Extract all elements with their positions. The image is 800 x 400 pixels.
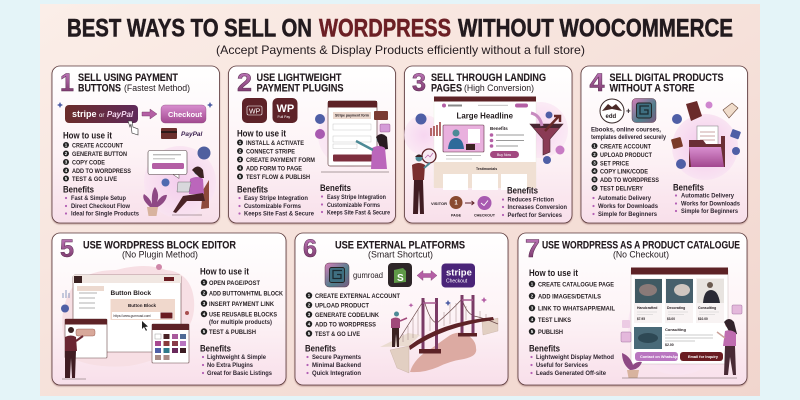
checkout button: Checkout <box>168 110 203 119</box>
steps list: 5 <box>531 329 534 334</box>
icon: shopify: S <box>397 273 404 284</box>
illustration: catalogue browser: Contact on WhatsApp <box>640 355 680 359</box>
steps list <box>237 140 315 181</box>
steps list: 5 <box>593 177 596 182</box>
heading: SELL THROUGH LANDING <box>431 72 546 84</box>
icon: gumroad G <box>632 98 656 122</box>
illustration: catalogue browser: Consulting <box>698 306 716 310</box>
heading: WITHOUT A STORE <box>610 82 694 94</box>
visitor to checkout flow: PAGE <box>451 214 462 218</box>
title: WITHOUT WOOCOMMERCE <box>458 14 733 42</box>
illustration: landing page <box>404 96 568 214</box>
icon: edd <box>600 99 624 123</box>
steps list: CREATE EXTERNAL ACCOUNT <box>315 293 400 300</box>
benefits: Perfect for Services <box>508 212 563 219</box>
benefits <box>529 344 614 377</box>
steps list: 4 <box>203 312 206 316</box>
visitor to checkout flow: VISITOR <box>431 202 448 206</box>
numeral 6: 6 <box>303 235 317 263</box>
illustration: block editor: Button Block <box>128 303 156 308</box>
benefits: Quick Integration <box>312 370 361 377</box>
illustration: woman with laptop <box>57 102 216 218</box>
heading: USE LIGHTWEIGHT <box>256 72 342 84</box>
steps list: TEST & PUBLISH <box>209 329 256 336</box>
steps list: 1 <box>203 280 206 285</box>
steps list: 1 <box>65 143 68 148</box>
benefits right <box>320 183 390 216</box>
steps list: CONNECT STRIPE <box>246 148 296 155</box>
illustration: landing page: Buy Now <box>497 153 511 157</box>
icon: WP Full Pay <box>272 98 298 123</box>
steps list <box>201 279 283 336</box>
steps list: TEST & GO LIVE <box>72 176 118 183</box>
steps list: 1 <box>531 282 534 286</box>
panel 2: lightweight plugins <box>228 66 396 223</box>
steps list: 2 <box>239 148 242 154</box>
heading: PAYMENT PLUGINS <box>256 82 344 94</box>
illustration: landing page: Large Headline <box>456 110 513 120</box>
benefits: Increases Conversion <box>508 204 567 211</box>
steps list: INSERT PAYMENT LINK <box>209 301 274 308</box>
benefits left: Keeps Site Fast & Secure <box>244 211 315 218</box>
heading <box>83 240 236 260</box>
numeral 4: 4 <box>590 69 605 97</box>
description: Ebooks, online courses, <box>591 126 661 134</box>
benefits right: Customizable Forms <box>327 202 380 209</box>
steps list: 5 <box>239 174 242 179</box>
benefits list <box>65 195 140 218</box>
icon: edd: edd <box>606 114 617 120</box>
benefits right: Benefits <box>320 183 351 194</box>
steps list: PUBLISH <box>538 329 563 336</box>
steps list: 4 <box>65 168 68 173</box>
heading: (Fastest Method) <box>124 83 190 93</box>
panel 3: landing pages <box>404 66 572 223</box>
subtitle: (Accept Payments & Display Products efficiently without a full store) <box>216 43 585 57</box>
benefits left <box>237 184 315 218</box>
steps list <box>529 281 615 336</box>
illustration: bridge <box>380 295 498 373</box>
visitor to checkout flow: CHECKOUT <box>474 214 496 218</box>
illustration: catalogue browser: $10.00 <box>698 317 708 321</box>
title <box>67 14 733 42</box>
illustration: folder <box>671 101 741 180</box>
steps list: ADD FORM TO PAGE <box>246 165 303 172</box>
steps list: UPLOAD PRODUCT <box>315 302 369 309</box>
steps list: ADD IMAGES/DETAILS <box>538 293 602 300</box>
benefits right: Benefits <box>673 182 704 194</box>
steps list: ADD TO WORDPRESS <box>315 321 377 328</box>
numeral 5: 5 <box>60 235 74 263</box>
heading: (No Checkout) <box>613 250 669 260</box>
steps list: 3 <box>531 306 534 310</box>
steps list: 4 <box>531 317 534 322</box>
illustration: catalogue browser: $3.00 <box>667 317 675 321</box>
steps list: 5 <box>65 176 68 181</box>
steps list: CREATE CATALOGUE PAGE <box>538 281 615 288</box>
benefits right: Simple for Beginners <box>681 208 739 215</box>
card and PayPal <box>161 128 203 139</box>
illustration: catalogue browser: Email for Inquiry <box>688 355 719 359</box>
icon: WP Full Pay: WP <box>276 103 294 115</box>
heading <box>335 240 465 260</box>
icon: hand cursor <box>128 121 138 135</box>
illustration: block editor: Button Block <box>110 290 151 297</box>
illustration: payment form and woman: Stripe payment form <box>335 114 369 118</box>
steps list: 6 <box>593 186 596 190</box>
title: WORDPRESS <box>319 14 451 42</box>
card and PayPal: PayPal <box>181 131 203 138</box>
benefits left: Works for Downloads <box>598 203 659 210</box>
benefits: Leads Generated Off-site <box>536 370 607 377</box>
double arrow <box>417 270 437 280</box>
plus: + <box>626 106 631 116</box>
illustration: landing page: Testimonials <box>476 167 497 171</box>
steps list: 2 <box>308 302 311 308</box>
steps list: CREATE ACCOUNT <box>600 143 651 150</box>
illustration: payment form and woman <box>315 101 390 172</box>
heading <box>610 72 724 94</box>
benefits <box>502 186 567 219</box>
icon: WP: WP <box>249 108 261 116</box>
benefits left: Benefits <box>237 184 268 196</box>
heading: (Smart Shortcut) <box>368 250 433 260</box>
heading: SELL USING PAYMENT <box>78 72 178 84</box>
panel 7: product catalogue <box>518 233 747 385</box>
benefits: Useful for Services <box>536 362 589 369</box>
steps list: TEST FLOW & PUBLISH <box>246 174 310 181</box>
heading: USE EXTERNAL PLATFORMS <box>335 240 465 252</box>
steps list: (for multiple products) <box>209 319 272 326</box>
steps list: ADD TO WORDPRESS <box>600 177 660 184</box>
panel 1: payment buttons <box>52 66 220 223</box>
illustration: catalogue browser: Handcrafted <box>637 306 657 310</box>
benefits: Reduces Friction <box>508 197 554 204</box>
icon: stripe checkout <box>442 264 475 288</box>
icon: stripe checkout: stripe <box>446 268 472 278</box>
steps list: 3 <box>239 157 242 162</box>
heading: BUTTONS <box>78 82 121 94</box>
benefits left: Automatic Delivery <box>598 195 652 202</box>
steps list: 1 <box>308 293 311 298</box>
steps list: CREATE PAYMENT FORM <box>246 157 315 164</box>
steps list: TEST DELIVERY <box>600 185 644 192</box>
benefits: Secure Payments <box>312 354 362 361</box>
benefits left: Customizable Forms <box>244 203 302 210</box>
numeral 7: 7 <box>525 235 540 263</box>
steps list: 2 <box>531 294 534 298</box>
stripe or paypal button <box>65 105 138 123</box>
icon: stripe checkout: Checkout <box>446 278 468 284</box>
steps list: INSTALL & ACTIVATE <box>246 140 305 147</box>
illustration: block editor: https://www.gumroad.com/ <box>114 314 151 318</box>
heading: USE WORDPRESS BLOCK EDITOR <box>83 240 236 252</box>
steps list: ADD TO WORDPRESS <box>72 168 132 175</box>
illustration: catalogue browser: $7.95 <box>637 317 645 321</box>
benefits heading: Benefits <box>63 184 94 196</box>
panel 6: external platforms <box>295 233 508 385</box>
icon: shopify <box>388 263 412 287</box>
arrow <box>142 109 157 119</box>
steps list: GENERATE BUTTON <box>72 151 127 158</box>
steps list: LINK TO WHATSAPP/EMAIL <box>538 305 615 312</box>
steps list: OPEN PAGE/POST <box>209 280 260 287</box>
benefits right: Easy Stripe Integration <box>327 194 386 201</box>
benefits left: Easy Stripe Integration <box>244 195 308 202</box>
benefits: Lightweight Display Method <box>536 354 614 361</box>
heading: (High Conversion) <box>464 83 534 93</box>
illustration: catalogue browser: Consulting <box>665 327 686 332</box>
benefits right <box>673 182 741 215</box>
heading <box>542 240 740 260</box>
steps list: GENERATE CODE/LINK <box>315 312 379 319</box>
steps list: 4 <box>593 168 596 174</box>
benefits: Minimal Backend <box>312 362 361 369</box>
steps list: 5 <box>308 331 311 336</box>
how to use: How to use it <box>529 268 579 279</box>
steps list: 5 <box>203 329 206 334</box>
steps list: 3 <box>203 301 206 306</box>
steps list: 3 <box>65 160 68 164</box>
illustration: landing page: Benefits <box>490 126 508 131</box>
illustration: catalogue browser: Decorating <box>667 306 685 310</box>
steps list <box>306 292 400 338</box>
benefits list: Direct Checkout Flow <box>71 203 130 210</box>
benefits right: Keeps Site Fast & Secure <box>327 209 390 216</box>
steps list: TEST LINKS <box>538 317 572 324</box>
illustration: catalogue browser: $2.00 <box>665 343 674 347</box>
stripe or paypal button: stripe or PayPal <box>72 109 134 119</box>
steps list: USE REUSABLE BLOCKS <box>209 311 278 318</box>
icon: WP Full Pay: Full Pay <box>278 115 290 119</box>
benefits list: Fast & Simple Setup <box>71 195 126 202</box>
benefits: Benefits <box>305 344 336 354</box>
heading <box>431 72 546 94</box>
benefits <box>200 344 273 377</box>
steps list: 1 <box>239 140 242 145</box>
panel 4: digital products <box>581 66 748 223</box>
icon: gumroad: gumroad <box>353 271 383 280</box>
icon: WP <box>242 98 267 123</box>
benefits left: Simple for Beginners <box>598 211 658 218</box>
numeral 3: 3 <box>412 69 426 97</box>
benefits <box>305 344 362 377</box>
steps list: 3 <box>308 312 311 317</box>
heading <box>78 72 190 94</box>
benefits right: Works for Downloads <box>681 201 741 208</box>
benefits: Great for Basic Listings <box>207 370 273 377</box>
heading: PAGES <box>431 82 462 94</box>
steps list: SET PRICE <box>600 160 630 167</box>
heading: SELL DIGITAL PRODUCTS <box>610 72 724 84</box>
benefits: Benefits <box>200 344 231 354</box>
how to use: How to use it <box>200 266 250 278</box>
illustration: catalogue browser <box>621 268 742 378</box>
visitor to checkout flow <box>431 196 496 218</box>
steps list: 2 <box>203 290 206 296</box>
visitor to checkout flow: 1 <box>454 200 458 206</box>
checkout button <box>161 105 206 123</box>
icon: gumroad <box>325 263 383 287</box>
steps list: 3 <box>593 160 596 166</box>
benefits: Lightweight & Simple <box>207 354 267 361</box>
steps list: ADD BUTTON/HTML BLOCK <box>209 290 283 297</box>
title: BEST WAYS TO SELL ON <box>67 14 312 42</box>
steps list: 4 <box>308 322 311 326</box>
heading: USE WORDPRESS AS A PRODUCT CATALOGUE <box>542 240 740 252</box>
panel 5: block editor <box>52 233 286 385</box>
benefits right: Automatic Delivery <box>681 193 735 200</box>
benefits: No Extra Plugins <box>207 362 254 369</box>
steps list: 2 <box>593 152 596 157</box>
steps list: COPY LINK/CODE <box>600 168 649 175</box>
how to use: How to use it <box>63 130 113 142</box>
steps list: TEST & GO LIVE <box>315 331 361 338</box>
steps list: 4 <box>239 166 242 170</box>
benefits: Benefits <box>529 344 560 354</box>
benefits left <box>592 195 659 218</box>
illustration: block editor <box>61 264 194 379</box>
numeral 2: 2 <box>237 69 252 97</box>
numeral 1: 1 <box>60 69 74 97</box>
steps list <box>63 142 132 183</box>
steps list: COPY CODE <box>72 159 106 166</box>
steps list: CREATE ACCOUNT <box>72 142 123 149</box>
description <box>591 126 666 141</box>
steps list: 1 <box>593 144 596 148</box>
description: templates delivered securely <box>591 134 666 141</box>
steps list <box>592 143 660 192</box>
benefits: Benefits <box>507 186 538 196</box>
how to use: How to use it <box>237 128 287 140</box>
steps list: 2 <box>65 151 68 156</box>
heading: (No Plugin Method) <box>122 250 198 260</box>
heading <box>256 72 344 94</box>
steps list: UPLOAD PRODUCT <box>600 152 652 159</box>
benefits list: Ideal for Single Products <box>71 211 140 218</box>
